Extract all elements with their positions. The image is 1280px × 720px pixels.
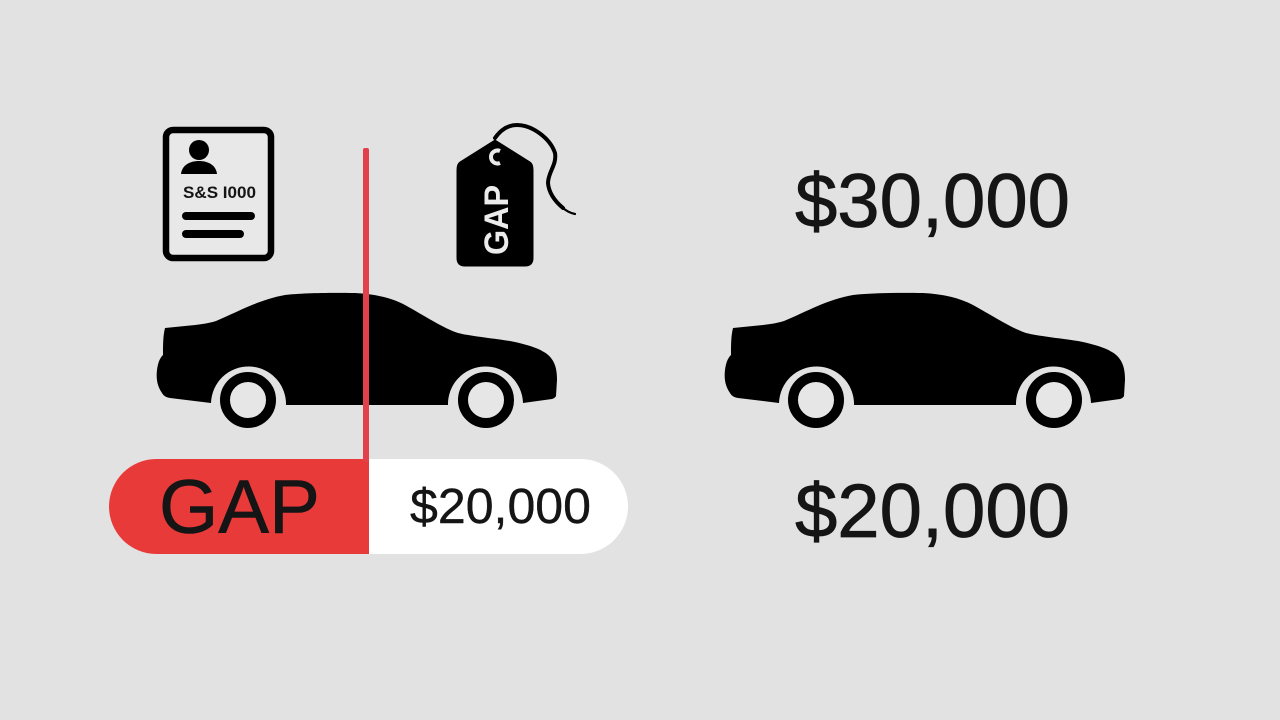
icon: left car	[157, 293, 557, 423]
value: $30,000: $30,000	[795, 159, 1070, 244]
value: $20,000: $20,000	[795, 469, 1070, 554]
icon: right car	[725, 293, 1125, 423]
icon: ID document: S&S I000	[183, 183, 256, 202]
pill: GAP and amount: $20,000	[410, 480, 591, 534]
pill: GAP and amount	[109, 459, 628, 554]
pill: GAP and amount: GAP	[159, 465, 320, 550]
red divider line	[363, 148, 369, 462]
icon: GAP price tag	[457, 125, 575, 266]
icon: ID document	[166, 130, 271, 258]
icon: GAP price tag: GAP	[478, 185, 516, 255]
